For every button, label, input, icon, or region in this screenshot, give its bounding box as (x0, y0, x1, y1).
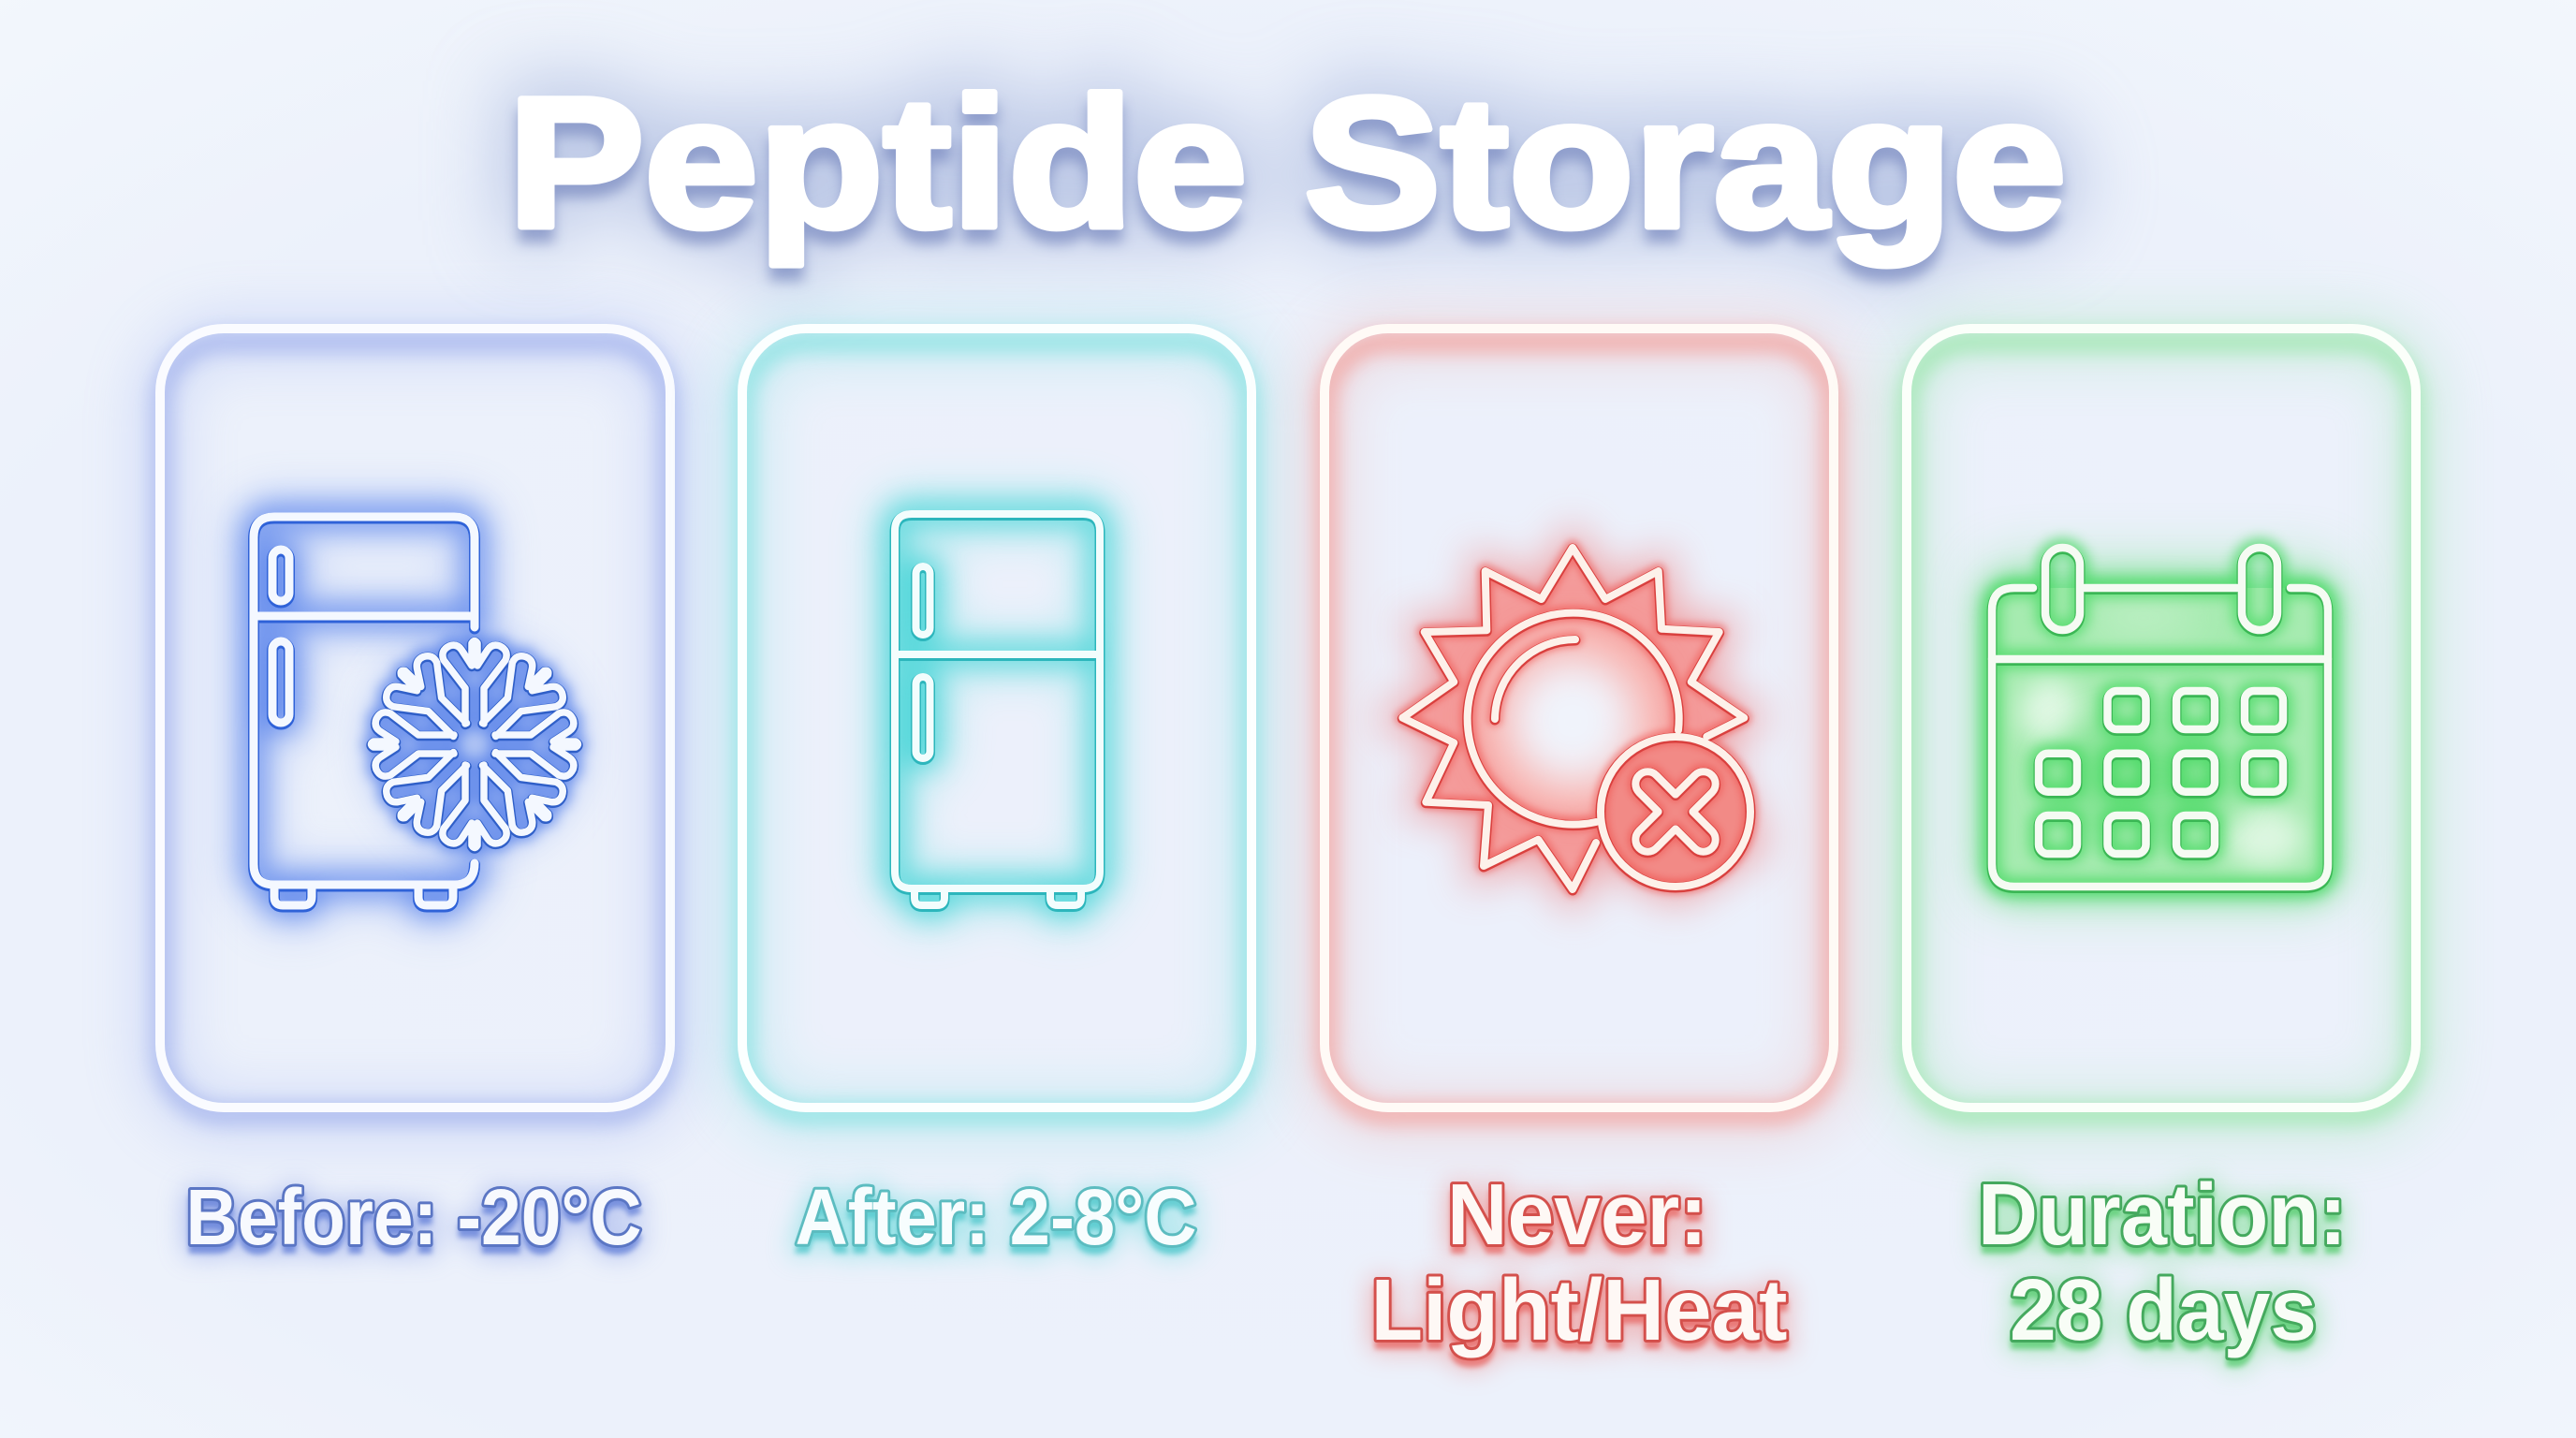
panel: duration, green card (1907, 329, 2416, 1117)
label: after: After: 2-8°C (796, 1178, 1196, 1266)
label: never light or heat: Never: (1447, 1170, 1707, 1268)
label: duration 28 days (1978, 1166, 2347, 1366)
label: duration 28 days: 28 days (2010, 1269, 2317, 1366)
label: never light or heat (1370, 1166, 1788, 1366)
title: Peptide Storage (507, 59, 2067, 266)
panel: never, red card (1325, 329, 1834, 1117)
label: before: Before: -20°C (185, 1173, 642, 1261)
label: after: After: 2-8°C (796, 1181, 1196, 1269)
label: after: After: 2-8°C (796, 1173, 1196, 1261)
icon: calendar (1980, 548, 2340, 903)
label: duration 28 days: Duration: (1978, 1166, 2347, 1263)
label: before: Before: -20°C (185, 1178, 642, 1266)
label: never light or heat: Never: (1447, 1173, 1707, 1270)
label: never light or heat: Light/Heat (1370, 1261, 1788, 1358)
label: duration 28 days: Duration: (1978, 1170, 2347, 1268)
label: never light or heat: Light/Heat (1370, 1266, 1788, 1363)
title: Peptide Storage (507, 72, 2067, 279)
label: never light or heat: Light/Heat (1370, 1269, 1788, 1366)
panel: before, blue card (160, 329, 670, 1117)
icon: sun with cross (1402, 548, 1750, 890)
panel: after, teal card (742, 329, 1251, 1117)
label: never light or heat: Never: (1447, 1166, 1707, 1263)
icon: freezer with snowflake (254, 517, 579, 906)
label: before: Before: -20°C (185, 1181, 642, 1269)
label: duration 28 days: 28 days (2010, 1261, 2317, 1358)
label: duration 28 days: Duration: (1978, 1173, 2347, 1270)
title: Peptide Storage (507, 59, 2067, 266)
label: duration 28 days: 28 days (2010, 1266, 2317, 1363)
icon: refrigerator (895, 514, 1100, 906)
